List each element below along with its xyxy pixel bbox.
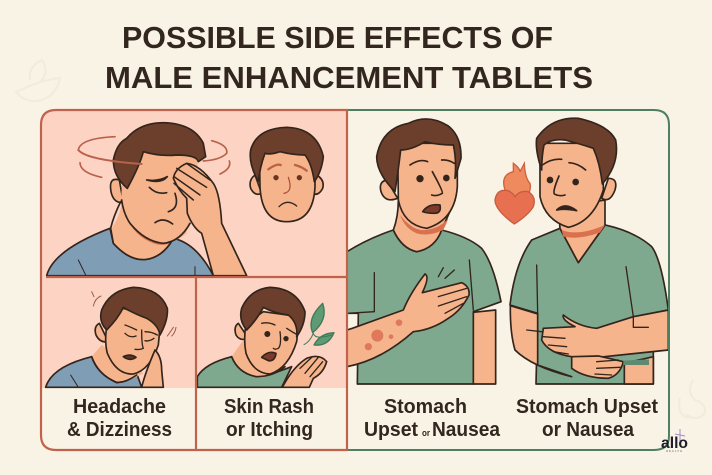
label: stomach upset or nausea 1: Upset — [364, 419, 418, 441]
label: stomach upset or nausea 1: Stomach — [384, 396, 467, 418]
logo: allo health: allo — [661, 435, 688, 452]
watermark: stomach — [679, 380, 705, 418]
panel borders: red frame — [41, 110, 347, 450]
illustration: skin rash man with leaves — [197, 287, 334, 387]
panel borders: green frame — [347, 110, 669, 450]
watermark: leaf bowl — [16, 60, 60, 101]
label: stomach upset or nausea 1 — [364, 396, 501, 441]
panel: left pink fill — [42, 111, 346, 388]
logo: allo health: HEALTH — [666, 449, 682, 453]
label: headache: & Dizziness — [67, 419, 172, 441]
illustration: worried face — [250, 127, 323, 222]
panel: right fill — [347, 110, 669, 450]
label: headache: Headache — [73, 396, 166, 418]
illustration: man with hand on chest — [347, 119, 501, 384]
label: skin rash: Skin Rash — [224, 396, 314, 418]
illustration: headache man with dizziness — [47, 123, 247, 276]
label: skin rash — [224, 396, 314, 441]
label: stomach upset or nausea 1: or — [422, 428, 430, 438]
label: stomach upset or nausea 2: or Nausea — [542, 419, 635, 441]
label: stomach upset or nausea 2 — [516, 396, 658, 441]
label: stomach upset or nausea 2: Stomach Upset — [516, 396, 658, 418]
title: POSSIBLE SIDE EFFECTS OF — [122, 20, 553, 55]
illustration: man holding stomach — [510, 118, 668, 384]
label: headache — [67, 396, 172, 441]
label: stomach upset or nausea 1: Nausea — [432, 419, 501, 441]
label: skin rash: or Itching — [226, 419, 313, 441]
icon: flaming heart — [495, 163, 534, 224]
illustration: headache man bottom left — [46, 287, 176, 387]
title — [105, 20, 593, 95]
title: MALE ENHANCEMENT TABLETS — [105, 60, 593, 95]
